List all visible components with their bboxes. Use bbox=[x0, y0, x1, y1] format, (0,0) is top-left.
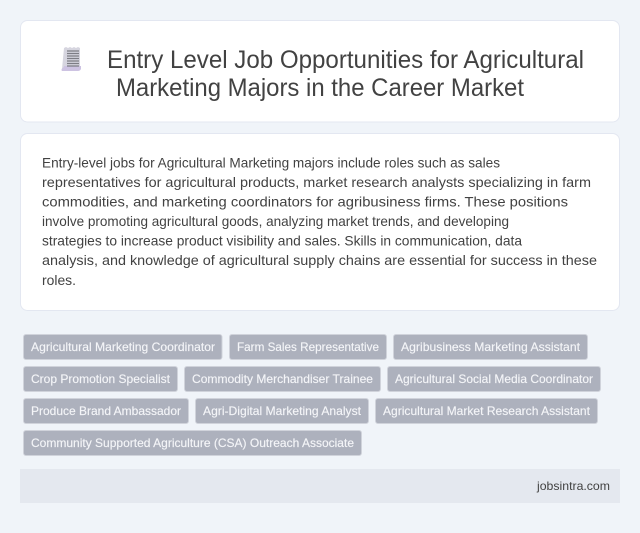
panel: header bbox=[20, 20, 620, 122]
tag: Community Supported Agriculture (CSA) Outreach Associate bbox=[31, 436, 354, 450]
tag: Farm Sales Representative bbox=[237, 340, 379, 354]
title: Marketing Majors in the Career Market bbox=[116, 74, 524, 102]
description text: involve promoting agricultural goods, analyzing market trends, and developing bbox=[42, 213, 509, 229]
description text: roles. bbox=[42, 272, 76, 288]
tag: Agricultural Social Media Coordinator bbox=[395, 372, 593, 386]
tag: Agribusiness Marketing Assistant bbox=[401, 340, 581, 354]
description text: commodities, and marketing coordinators for agribusiness firms. These positions bbox=[42, 194, 568, 210]
description text: analysis, and knowledge of agricultural supply chains are essential for success in these bbox=[42, 252, 597, 268]
tag bbox=[230, 334, 386, 360]
tag: Agricultural Marketing Coordinator bbox=[31, 340, 215, 354]
title bbox=[107, 46, 584, 102]
description text: Entry-level jobs for Agricultural Marketing majors include roles such as sales bbox=[42, 154, 500, 170]
tag bbox=[394, 334, 588, 360]
description text bbox=[42, 154, 597, 288]
footer bar bbox=[20, 469, 620, 503]
tag: Crop Promotion Specialist bbox=[31, 372, 171, 386]
tag: Agricultural Market Research Assistant bbox=[383, 404, 591, 418]
tag: Produce Brand Ambassador bbox=[31, 404, 181, 418]
tag bbox=[388, 366, 600, 392]
icon: document scroll bbox=[62, 47, 81, 71]
tag bbox=[24, 366, 178, 392]
description text: strategies to increase product visibility and sales. Skills in communication, data bbox=[42, 232, 522, 248]
description text: representatives for agricultural products, market research analysts specializing in farm bbox=[42, 174, 591, 190]
tag: Agri-Digital Marketing Analyst bbox=[203, 404, 362, 418]
tag bbox=[24, 334, 222, 360]
tag bbox=[24, 398, 188, 424]
footer site name: jobsintra.com bbox=[536, 479, 610, 493]
tag bbox=[184, 366, 380, 392]
panel: description bbox=[20, 134, 620, 310]
tag bbox=[196, 398, 368, 424]
tag list bbox=[24, 334, 600, 456]
tag bbox=[24, 430, 362, 456]
title: Entry Level Job Opportunities for Agricultural bbox=[107, 46, 584, 74]
tag bbox=[376, 398, 598, 424]
tag: Commodity Merchandiser Trainee bbox=[192, 372, 373, 386]
